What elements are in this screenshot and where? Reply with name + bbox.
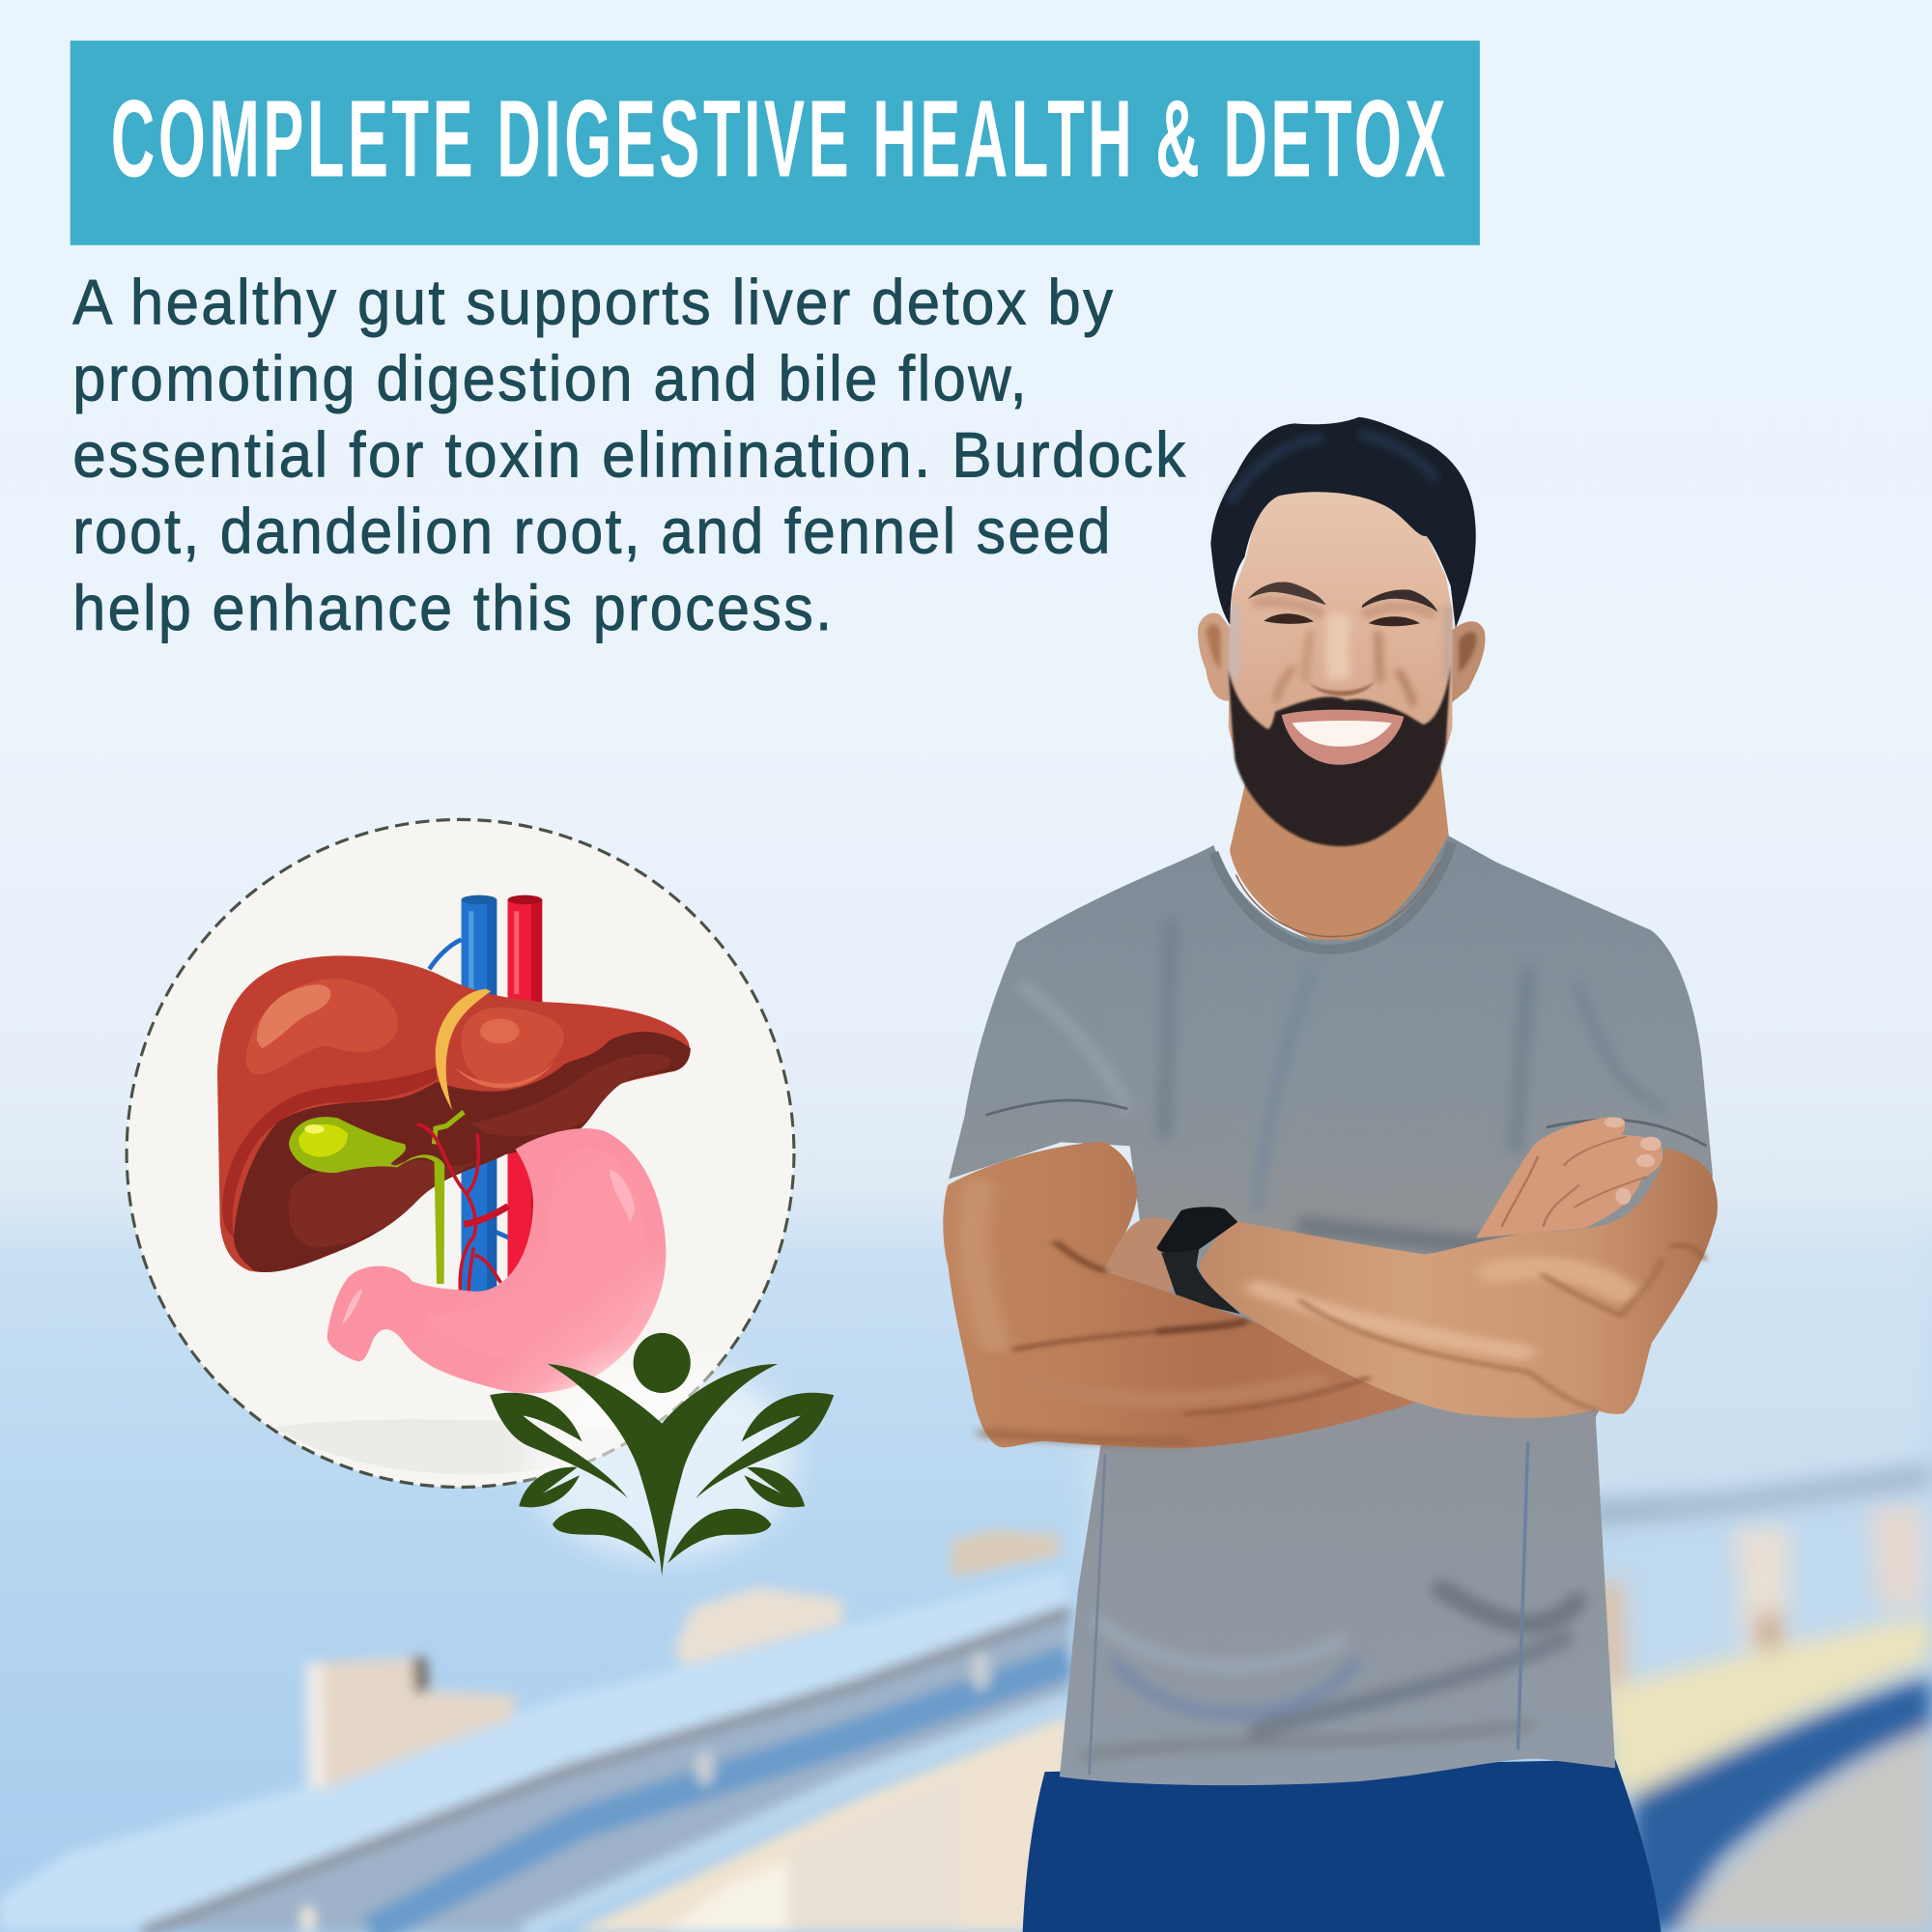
brand logo: figure with leaves: [490, 1333, 834, 1577]
t-shirt: [936, 826, 1725, 1799]
dashed circle panel: [127, 819, 794, 1487]
intro paragraph: essential for toxin elimination. Burdock: [72, 420, 1188, 492]
intro paragraph: promoting digestion and bile flow,: [72, 344, 1029, 415]
head: [1198, 417, 1485, 846]
title banner: [71, 41, 1480, 245]
man with crossed arms: [936, 417, 1725, 1932]
eyebrows and eyes: [1248, 582, 1437, 626]
face: [1229, 486, 1452, 831]
arm muscle shading: [974, 1188, 1704, 1441]
intro paragraph: [72, 267, 1188, 644]
neck: [1230, 752, 1449, 944]
left arm: [943, 1142, 1416, 1448]
intro paragraph: A healthy gut supports liver detox by: [72, 267, 1115, 338]
nose shadow: [1309, 681, 1375, 696]
ears: [1198, 613, 1485, 703]
intro paragraph: help enhance this process.: [72, 573, 835, 644]
crossed arms: [943, 1117, 1718, 1448]
smile: [1282, 710, 1404, 765]
smartwatch: [1157, 1207, 1240, 1314]
liver: [217, 955, 691, 1272]
intro paragraph: root, dandelion root, and fennel seed: [72, 497, 1113, 568]
shorts: [1023, 1759, 1661, 1932]
right forearm: [1199, 1148, 1718, 1418]
hair sheen: [1230, 435, 1436, 502]
illustration badge: [127, 819, 834, 1577]
hair: [1210, 417, 1476, 628]
tucked hand: [1103, 1217, 1180, 1293]
beard: [1229, 664, 1451, 846]
stomach: [327, 1128, 666, 1393]
logo glow: [528, 1361, 795, 1558]
fingers: [1476, 1117, 1662, 1238]
blood vessels: [429, 895, 542, 1293]
facial shading: [1234, 602, 1447, 705]
gallbladder and bile duct: [289, 1112, 464, 1284]
red arteries: [417, 1124, 508, 1292]
